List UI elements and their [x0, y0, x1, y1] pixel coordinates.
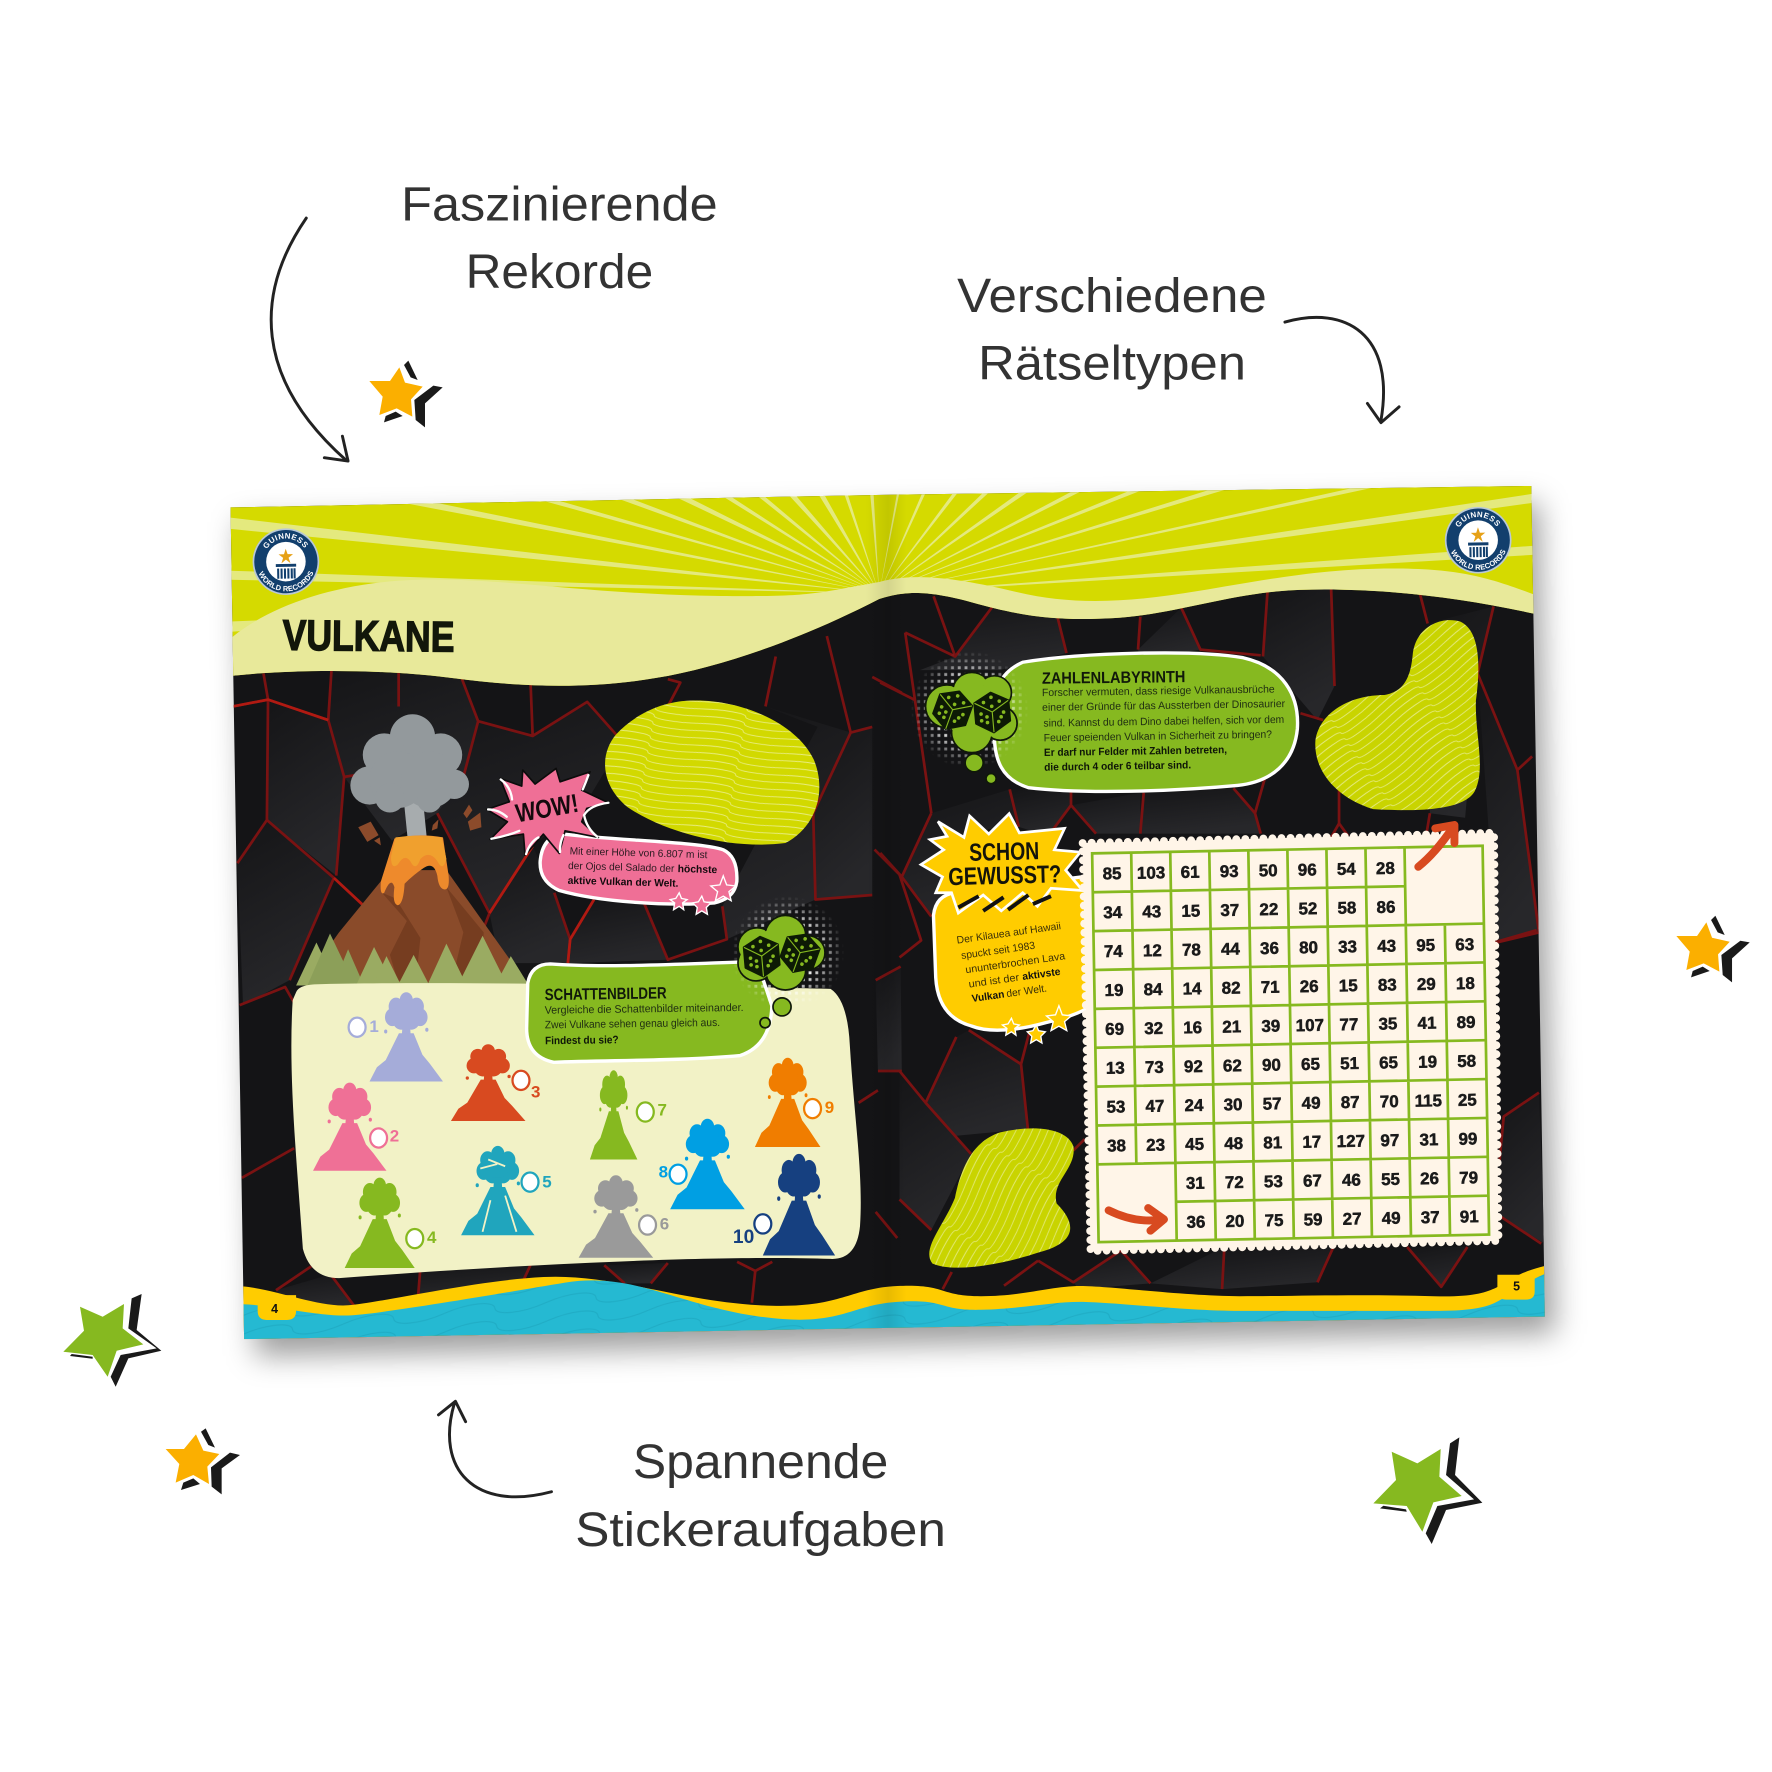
- number maze grid: 46: [1342, 1170, 1361, 1190]
- decorative stars: [1002, 1006, 1071, 1043]
- number maze grid: 35: [1378, 1014, 1398, 1034]
- number maze grid: 58: [1337, 898, 1357, 918]
- number maze grid: 115: [1414, 1091, 1442, 1111]
- arrow: maze exit: [1418, 825, 1454, 867]
- caption: Verschiedene Rätseltypen: [957, 269, 1267, 391]
- silhouette 10: 10: [733, 1227, 754, 1248]
- star: orange right: [1676, 916, 1750, 982]
- forest: [296, 933, 529, 985]
- sticker blob: round lime: [605, 701, 819, 845]
- number maze grid: 15: [1339, 976, 1358, 995]
- title VULKANE: VULKANE: [282, 612, 455, 662]
- number maze grid: 58: [1457, 1052, 1476, 1071]
- number maze grid: 70: [1380, 1092, 1399, 1111]
- number maze grid: 44: [1221, 940, 1241, 959]
- page number 5: 5: [1513, 1280, 1520, 1294]
- illustration: erupting volcano: [296, 714, 529, 985]
- silhouette 3: [451, 1044, 540, 1121]
- silhouette 7: 7: [658, 1100, 667, 1119]
- bubble: Zahlenlabyrinth: [994, 653, 1298, 791]
- number maze grid: 23: [1146, 1135, 1165, 1155]
- number maze grid: 83: [1378, 975, 1397, 995]
- caption: Spannende Stickeraufgaben: [575, 1435, 946, 1557]
- number maze grid: 87: [1341, 1093, 1360, 1112]
- number maze grid: 81: [1263, 1133, 1282, 1153]
- number maze grid: 31: [1186, 1174, 1205, 1193]
- fact text: spuckt seit 1983: [961, 941, 1036, 962]
- number maze grid: 53: [1264, 1172, 1283, 1191]
- number maze grid: 95: [1416, 936, 1435, 955]
- silhouette 8: [659, 1119, 745, 1209]
- heading: SCHATTENBILDER: [545, 984, 667, 1004]
- page number 4: 4: [271, 1302, 278, 1316]
- number maze grid: 45: [1185, 1135, 1204, 1154]
- instruction text: Findest du sie?: [545, 1034, 619, 1047]
- number maze grid: 55: [1381, 1170, 1400, 1189]
- number maze grid: 37: [1421, 1208, 1440, 1227]
- number maze grid: 22: [1259, 900, 1278, 919]
- number maze grid: 97: [1380, 1131, 1399, 1150]
- number maze grid: 107: [1296, 1016, 1324, 1035]
- number maze grid: 90: [1262, 1055, 1281, 1075]
- fact text: Vulkan: [971, 990, 1005, 1005]
- number maze grid: 65: [1301, 1055, 1320, 1074]
- number maze grid: 14: [1182, 979, 1202, 999]
- number maze grid: 36: [1186, 1212, 1206, 1232]
- pale title wave: [231, 568, 1537, 686]
- number maze grid: 48: [1224, 1134, 1243, 1153]
- logo: Guinness World Records left: WORLD RECORDS: [259, 570, 313, 592]
- instruction text: sind. Kannst du dem Dino dabei helfen, sich vor dem: [1043, 714, 1284, 730]
- caption: Faszinierende Rekorde: Rekorde: [466, 245, 653, 299]
- number maze grid: 77: [1339, 1015, 1358, 1034]
- logo: Guinness World Records left: GUINNESS: [264, 533, 308, 548]
- silhouette 1: [349, 992, 443, 1082]
- fact text: [956, 921, 1070, 1006]
- instruction text: [1042, 683, 1287, 774]
- silhouette 5: [461, 1146, 552, 1235]
- instruction text: Vergleiche die Schattenbilder miteinander.: [545, 1002, 744, 1017]
- number maze grid: 36: [1260, 939, 1279, 958]
- number maze grid: 47: [1145, 1097, 1165, 1116]
- fact text: Mit einer Höhe von 6.807 m ist: [569, 846, 708, 861]
- caption: Faszinierende Rekorde: [401, 177, 718, 299]
- instruction text: die durch 4 oder 6 teilbar sind.: [1044, 759, 1191, 774]
- logo: Guinness World Records right: GUINNESS: [1456, 512, 1500, 526]
- activity panel: silhouettes: [291, 983, 861, 1278]
- number maze grid: 24: [1184, 1096, 1204, 1115]
- number maze grid: 99: [1458, 1129, 1478, 1149]
- silhouette 7: [590, 1070, 667, 1159]
- number maze grid: 27: [1343, 1209, 1362, 1229]
- fact text: ununterbrochen Lava: [965, 951, 1066, 976]
- number maze grid: 78: [1182, 940, 1201, 960]
- decorative stars: [670, 876, 736, 914]
- star: orange bottom left: [166, 1428, 240, 1494]
- number maze grid: 54: [1337, 859, 1356, 879]
- star: green left: [63, 1294, 161, 1387]
- fact text: höchste: [678, 864, 718, 876]
- fact box: Schon gewusst: [921, 814, 1091, 1043]
- number maze grid: [1092, 846, 1489, 1242]
- book spread: [216, 471, 1562, 1362]
- flying rock pieces: [358, 805, 481, 845]
- number maze grid: 18: [1456, 974, 1475, 993]
- number maze grid: 43: [1142, 902, 1161, 922]
- silhouette 6: 6: [660, 1215, 669, 1234]
- number maze grid: 30: [1223, 1095, 1243, 1114]
- number maze grid: 19: [1418, 1052, 1437, 1072]
- number maze grid: 13: [1106, 1058, 1125, 1078]
- number maze grid: 39: [1261, 1017, 1280, 1036]
- number maze card: [1083, 833, 1499, 1251]
- number maze grid: 28: [1376, 859, 1395, 878]
- silhouette 4: [345, 1178, 437, 1268]
- number maze grid: 16: [1183, 1018, 1202, 1037]
- silhouette 4: 4: [427, 1228, 437, 1247]
- number maze grid: 41: [1417, 1013, 1437, 1033]
- silhouette 5: 5: [542, 1173, 552, 1192]
- number maze grid: 65: [1379, 1053, 1398, 1072]
- fact text: [568, 846, 718, 891]
- bubble: Schattenbilder: [527, 962, 772, 1062]
- number maze grid: 20: [1225, 1212, 1245, 1231]
- number maze grid: 82: [1222, 978, 1241, 998]
- sticker blob: small lime: [929, 1128, 1074, 1268]
- silhouette 6: [579, 1175, 669, 1258]
- number maze grid: 84: [1143, 980, 1163, 999]
- number maze grid: 29: [1417, 975, 1436, 994]
- number maze grid: 127: [1337, 1132, 1365, 1151]
- number maze grid: 79: [1459, 1168, 1478, 1188]
- number maze grid: 26: [1420, 1169, 1439, 1188]
- number maze grid: 53: [1106, 1097, 1125, 1117]
- number maze grid: 17: [1302, 1132, 1321, 1152]
- fact text: der Ojos del Salado der: [568, 861, 675, 875]
- number maze grid: 91: [1460, 1207, 1479, 1226]
- number maze grid: 31: [1419, 1130, 1438, 1149]
- logo: Guinness World Records left: [252, 528, 320, 595]
- spine shading: [874, 495, 900, 1328]
- number maze grid: 49: [1382, 1209, 1401, 1228]
- star: orange top: [369, 361, 443, 427]
- icon: dice thought cloud right page: [911, 651, 1028, 784]
- caption: Faszinierende Rekorde: Faszinierende: [401, 177, 718, 231]
- page number 5: [1497, 1275, 1535, 1300]
- caption: Verschiedene Rätseltypen: Rätseltypen: [978, 337, 1246, 391]
- top lime band with sun rays: [226, 475, 1548, 686]
- number maze grid: 89: [1456, 1013, 1476, 1032]
- arrow: to puzzle types: [1285, 317, 1399, 423]
- silhouette 10: [733, 1154, 835, 1256]
- number maze grid: 67: [1303, 1171, 1322, 1191]
- silhouette 3: 3: [531, 1082, 540, 1101]
- caption: Verschiedene Rätseltypen: Verschiedene: [957, 269, 1267, 323]
- arrow: to records: [271, 218, 348, 461]
- silhouette 9: [755, 1058, 834, 1147]
- fact text: aktive Vulkan der Welt.: [568, 876, 679, 890]
- fact text: aktivste: [1022, 967, 1061, 983]
- number maze grid: 32: [1144, 1019, 1163, 1038]
- mountain: [303, 870, 527, 983]
- fact text: und ist der: [968, 973, 1020, 991]
- number maze grid: 34: [1103, 903, 1123, 922]
- bottom wave: yellow: [243, 1266, 1545, 1340]
- number maze grid: 25: [1458, 1090, 1477, 1110]
- instruction text: Feuer speienden Vulkan in Sicherheit zu bringen?: [1044, 729, 1272, 744]
- number maze grid: 63: [1455, 935, 1474, 954]
- instruction text: Zwei Vulkane sehen genau gleich aus.: [545, 1017, 720, 1031]
- instruction text: einer der Gründe für das Aussterben der Dinosaurier: [1042, 698, 1286, 714]
- number maze grid: 33: [1338, 937, 1357, 957]
- number maze grid: 92: [1184, 1057, 1203, 1076]
- silhouette 2: [313, 1083, 399, 1171]
- number maze grid: 93: [1220, 862, 1239, 881]
- caption: Spannende Stickeraufgaben: Spannende: [633, 1435, 888, 1489]
- number maze grid: 19: [1104, 981, 1124, 1000]
- number maze grid: 75: [1264, 1211, 1284, 1230]
- number maze grid: 52: [1298, 899, 1317, 918]
- page number 4: [258, 1295, 296, 1320]
- number maze grid: 57: [1263, 1094, 1282, 1114]
- burst: WOW: [487, 768, 608, 855]
- caption: Spannende Stickeraufgaben: Stickeraufgaben: [575, 1503, 946, 1557]
- number maze grid: 43: [1377, 936, 1396, 956]
- heading: SCHON: [969, 837, 1040, 867]
- number maze grid: 72: [1225, 1173, 1244, 1192]
- star: green right: [1373, 1437, 1482, 1544]
- number maze grid: 15: [1181, 901, 1200, 921]
- number maze grid: 96: [1298, 860, 1317, 880]
- number maze grid: 71: [1261, 978, 1280, 997]
- instruction text: [545, 1002, 744, 1047]
- instruction text: Forscher vermuten, dass riesige Vulkanausbrüche: [1042, 683, 1275, 699]
- book shadow: [240, 503, 1555, 1356]
- fact text: der Welt.: [1006, 984, 1048, 1000]
- number maze grid: 69: [1105, 1020, 1124, 1039]
- silhouette 2: 2: [390, 1126, 399, 1145]
- number maze grid: 86: [1376, 898, 1396, 917]
- smoke column and cloud: [350, 714, 469, 842]
- silhouette 1: 1: [369, 1017, 379, 1036]
- number maze grid: 85: [1102, 864, 1122, 883]
- arrow: to sticker tasks: [438, 1401, 551, 1497]
- heading: ZAHLENLABYRINTH: [1042, 668, 1186, 688]
- instruction text: Er darf nur Felder mit Zahlen betreten,: [1044, 744, 1227, 759]
- bottom wave: teal water: [244, 1274, 1545, 1340]
- lava rock background: [216, 471, 1562, 1357]
- number maze grid: 21: [1222, 1017, 1241, 1037]
- number maze grid: 103: [1137, 863, 1165, 883]
- number maze grid: 51: [1340, 1054, 1359, 1073]
- heading: [947, 837, 1062, 891]
- number maze grid: 26: [1300, 977, 1319, 996]
- number maze grid: 12: [1143, 941, 1162, 960]
- number maze grid: 37: [1220, 901, 1239, 920]
- number maze grid: 61: [1181, 863, 1200, 882]
- number maze grid: 50: [1259, 861, 1278, 880]
- number maze grid: 49: [1302, 1094, 1321, 1113]
- lava: [381, 835, 449, 905]
- number maze grid: 38: [1107, 1136, 1126, 1156]
- fact text: Der Kilauea auf Hawaii: [956, 921, 1062, 947]
- arrow: maze start: [1109, 1208, 1164, 1231]
- silhouette 9: 9: [825, 1098, 834, 1117]
- number maze grid: 59: [1303, 1210, 1323, 1229]
- burst: WOW: WOW!: [513, 788, 581, 828]
- bubble: WOW fact pink: [540, 834, 737, 914]
- number maze grid: 80: [1299, 938, 1318, 957]
- logo: Guinness World Records right: [1444, 506, 1512, 574]
- burst: [921, 814, 1083, 913]
- sticker blob: boot-shaped lime: [1315, 620, 1480, 810]
- number maze grid: 74: [1104, 942, 1123, 961]
- logo: Guinness World Records right: WORLD RECORDS: [1451, 549, 1506, 570]
- heading: GEWUSST?: [948, 860, 1062, 891]
- silhouette 8: 8: [659, 1163, 668, 1182]
- number maze grid: 73: [1145, 1058, 1164, 1077]
- number maze grid: 62: [1223, 1056, 1242, 1076]
- icon: dice thought cloud left page: [731, 896, 844, 1028]
